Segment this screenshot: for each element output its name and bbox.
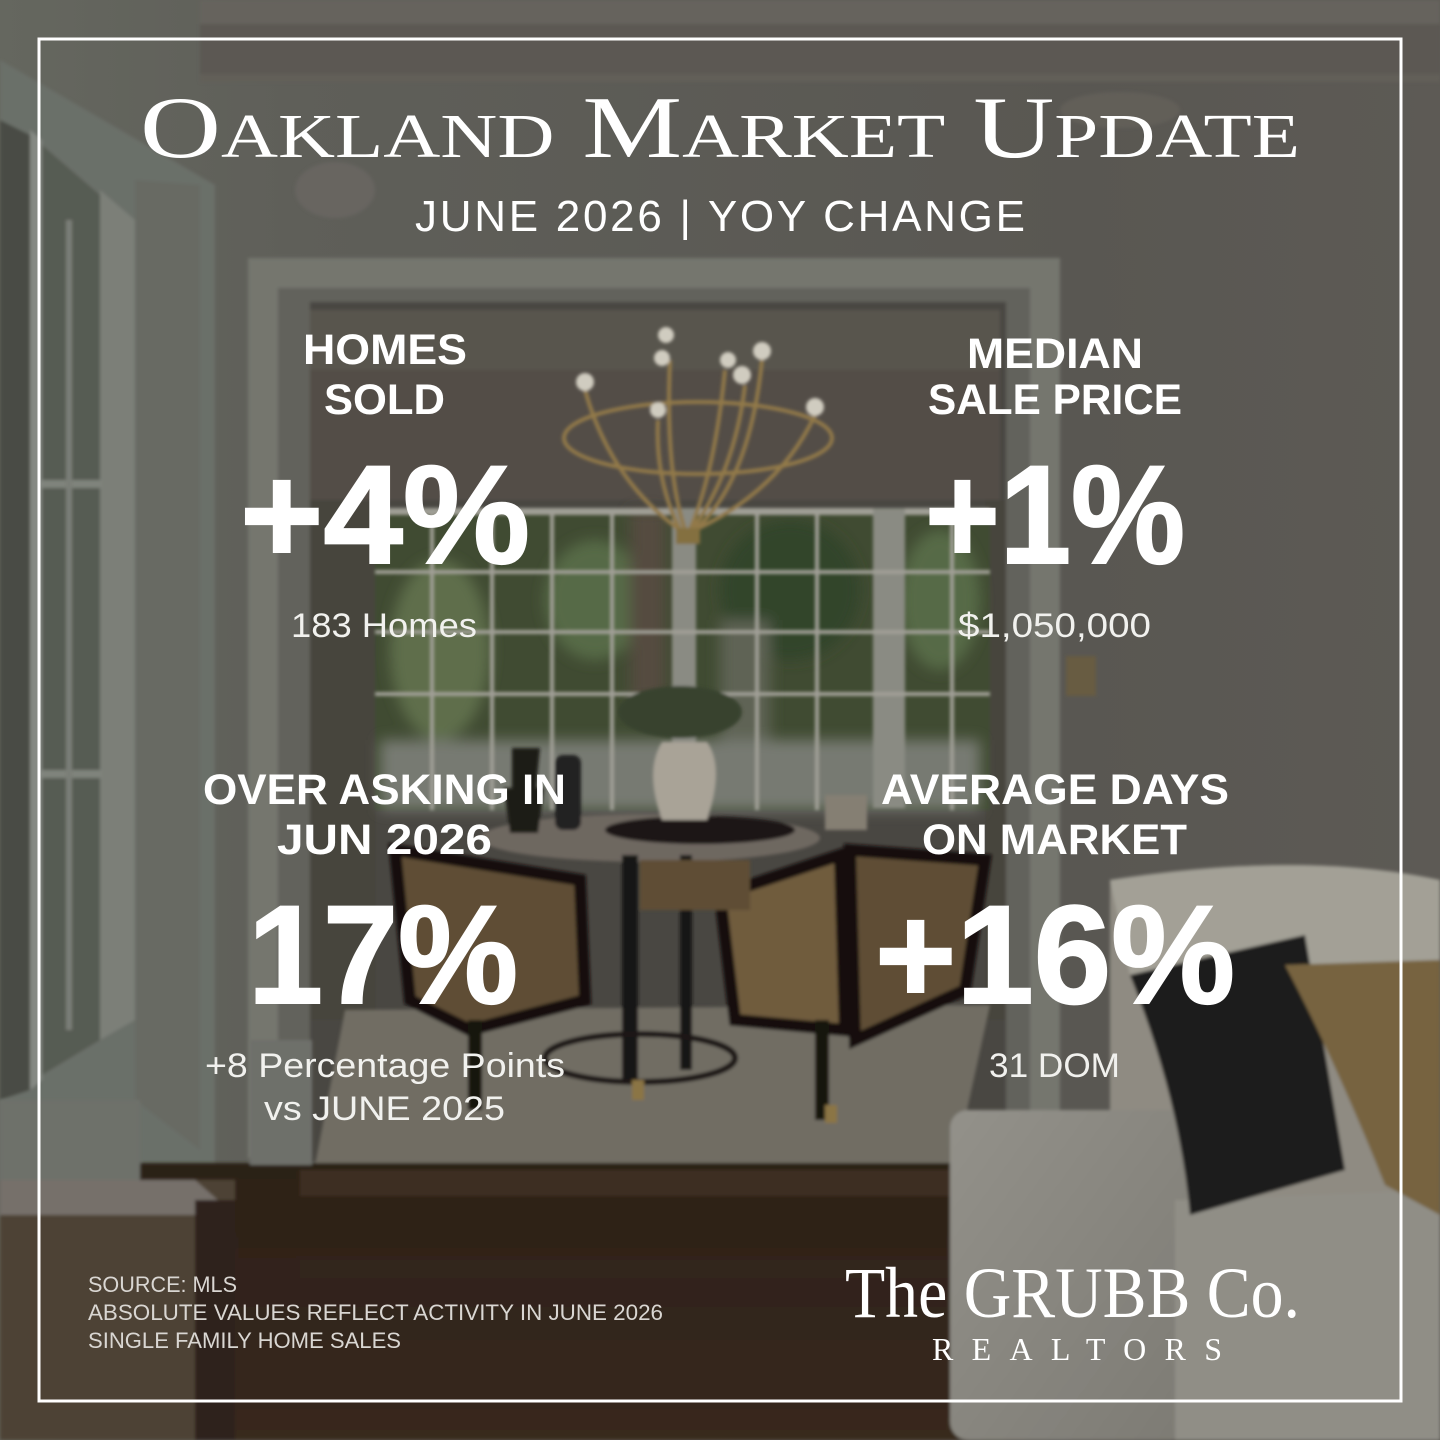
heading: days on market: AVERAGE DAYS <box>881 766 1229 814</box>
heading: homes sold: SOLD <box>324 376 445 424</box>
rug <box>315 1005 990 1165</box>
left window wall <box>0 60 215 1180</box>
source note: SOURCE: MLS <box>88 1272 237 1297</box>
garden <box>375 510 990 810</box>
table <box>480 814 820 862</box>
detail: percentage points: +8 Percentage Points <box>205 1047 565 1085</box>
source note: ABSOLUTE VALUES REFLECT ACTIVITY IN JUNE 2026 <box>88 1300 663 1325</box>
left column base <box>0 1100 140 1180</box>
panel: days on market <box>875 766 1235 1085</box>
stat: 17%: 17% <box>248 876 518 1033</box>
heading: homes sold: HOMES <box>303 326 467 374</box>
chandelier <box>564 360 832 530</box>
wall plate <box>1066 656 1096 696</box>
heading: over asking: OVER ASKING IN <box>203 766 566 814</box>
stat: +1%: +1% <box>925 436 1185 593</box>
sofa <box>1110 865 1440 1220</box>
stat: +4%: +4% <box>240 436 530 593</box>
detail: price: $1,050,000 <box>958 607 1151 645</box>
heading: over asking: JUN 2026 <box>277 816 492 864</box>
panel: over asking <box>203 766 566 1128</box>
window mullions <box>375 508 990 810</box>
stat: +16%: +16% <box>875 876 1235 1033</box>
chairs <box>395 850 585 1030</box>
vase and decor <box>653 742 716 820</box>
pillows <box>1130 935 1345 1215</box>
bench bottom left <box>0 1180 235 1440</box>
logo: REALTORS <box>932 1331 1222 1367</box>
inner ceiling <box>310 310 1000 370</box>
panel: homes sold <box>240 326 530 645</box>
subtitle: JUNE 2026 | YOY CHANGE <box>415 192 1025 241</box>
heading: days on market: ON MARKET <box>922 816 1187 864</box>
logo: The GRUBB Co. <box>845 1253 1300 1333</box>
heading: median sale price: MEDIAN <box>967 330 1143 378</box>
detail: 183 homes: 183 Homes <box>291 607 477 645</box>
detail: percentage points: vs JUNE 2025 <box>264 1090 505 1128</box>
ceiling moulding <box>200 0 1440 24</box>
floor <box>0 1163 1440 1440</box>
detail: 31 DOM: 31 DOM <box>989 1047 1120 1085</box>
back wall beside windows <box>310 500 376 1020</box>
logo <box>845 1253 1300 1367</box>
door frame <box>248 258 1060 1158</box>
title: Oakland Market Update <box>140 80 1300 177</box>
source note: SINGLE FAMILY HOME SALES <box>88 1328 401 1353</box>
ornament <box>295 162 375 218</box>
panel: median sale price <box>925 330 1185 645</box>
heading: median sale price: SALE PRICE <box>928 376 1182 424</box>
